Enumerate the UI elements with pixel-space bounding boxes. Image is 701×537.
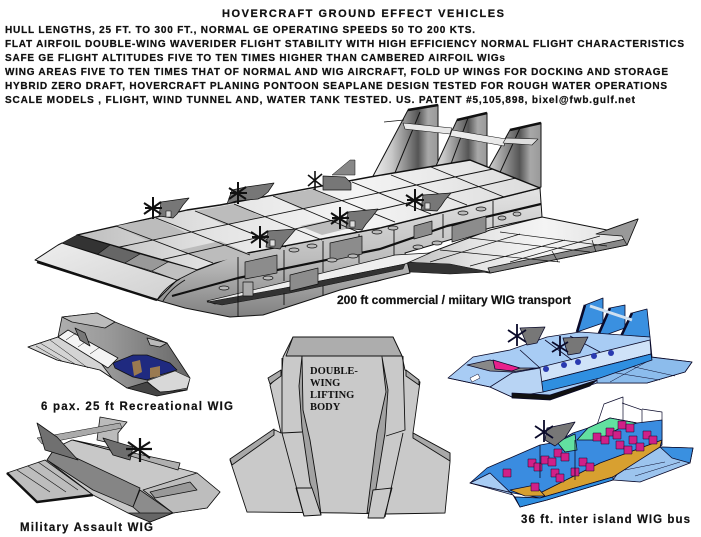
specification text block: SCALE MODELS , FLIGHT, WIND TUNNEL AND, WATER TANK TESTED. US. PATENT #5,105,898, bixel@fwb.gulf.net [5, 95, 636, 106]
bus engine [545, 422, 575, 446]
deck [77, 160, 540, 270]
label: double-wing lifting body [310, 366, 358, 413]
tails [577, 298, 603, 332]
nose [147, 371, 190, 393]
seats [503, 421, 657, 491]
keel [512, 380, 597, 400]
engine nacelles with propellers [144, 197, 189, 219]
lower hull [470, 473, 613, 507]
caption: main vehicle: 200 ft commercial / miitary WIG transport [337, 295, 571, 307]
wing [597, 357, 692, 383]
body [448, 332, 692, 398]
pontoon top strip [207, 253, 430, 304]
white deck band [58, 330, 118, 368]
hull bulkheads [238, 201, 493, 316]
nacelle and propeller [103, 438, 133, 460]
label: double-wing lifting body: WING [310, 378, 340, 389]
interior back wall [470, 418, 662, 498]
caption: bus: 36 ft. inter island WIG bus [521, 514, 690, 526]
pontoon dark strip [207, 264, 405, 305]
hull windows [245, 216, 486, 291]
nose tiles [62, 235, 197, 280]
wing [613, 447, 693, 482]
caption: military: Military Assault WIG [20, 522, 153, 534]
tail fins [372, 105, 541, 202]
left wing [7, 460, 93, 502]
cockpit [467, 360, 537, 372]
engines [520, 327, 545, 345]
specification text block: HYBRID ZERO DRAFT, HOVERCRAFT PLANING PONTOON SEAPLANE DESIGN TESTED FOR ROUGH WATER OPERATIONS [5, 81, 667, 92]
label: double-wing lifting body: DOUBLE- [310, 366, 358, 377]
side blue band [540, 354, 652, 392]
blue WIG vehicle [448, 298, 692, 400]
rear fin [97, 417, 127, 445]
specification text block: SAFE GE FLIGHT ALTITUDES FIVE TO TEN TIMES HIGHER THAN CAMBERED AIRFOIL WIGs [5, 53, 505, 64]
hull side [157, 188, 542, 317]
specification text block: WING AREAS FIVE TO TEN TIMES THAT OF NORMAL AND WIG AIRCRAFT, FOLD UP WINGS FOR DOCKING AND STORAGE [5, 67, 668, 78]
deck shaded panels [116, 189, 358, 263]
green upper interior [577, 418, 637, 440]
hull black stripe [172, 204, 541, 296]
roof frames [597, 397, 662, 440]
label: double-wing lifting body: LIFTING [310, 390, 354, 401]
side window band [537, 340, 651, 382]
double-wing lifting body plan view [230, 337, 450, 518]
deck grid [110, 167, 516, 264]
right wing [405, 217, 638, 273]
amber floor [540, 440, 662, 498]
title: HOVERCRAFT GROUND EFFECT VEHICLES [222, 8, 504, 20]
rear wing [28, 337, 112, 378]
caption: recreational: 6 pax. 25 ft Recreational WIG [41, 401, 233, 413]
body [47, 440, 220, 522]
canopy [113, 355, 177, 380]
military assault WIG vehicle [7, 417, 220, 522]
label: double-wing lifting body: BODY [310, 402, 341, 413]
WIG bus cutaway [470, 397, 693, 507]
main vehicle: 200 ft WIG transport [35, 105, 638, 317]
recreational WIG vehicle [28, 313, 190, 396]
specification text block [5, 25, 684, 106]
tail fin [37, 423, 78, 460]
specification text block: HULL LENGTHS, 25 FT. TO 300 FT., NORMAL GE OPERATING SPEEDS 50 TO 200 KTS. [5, 25, 475, 36]
specification text block: FLAT AIRFOIL DOUBLE-WING WAVERIDER FLIGHT STABILITY WITH HIGH EFFICIENCY NORMAL FLIGHT CHARACTERISTICS [5, 39, 684, 50]
nose section [35, 243, 177, 300]
